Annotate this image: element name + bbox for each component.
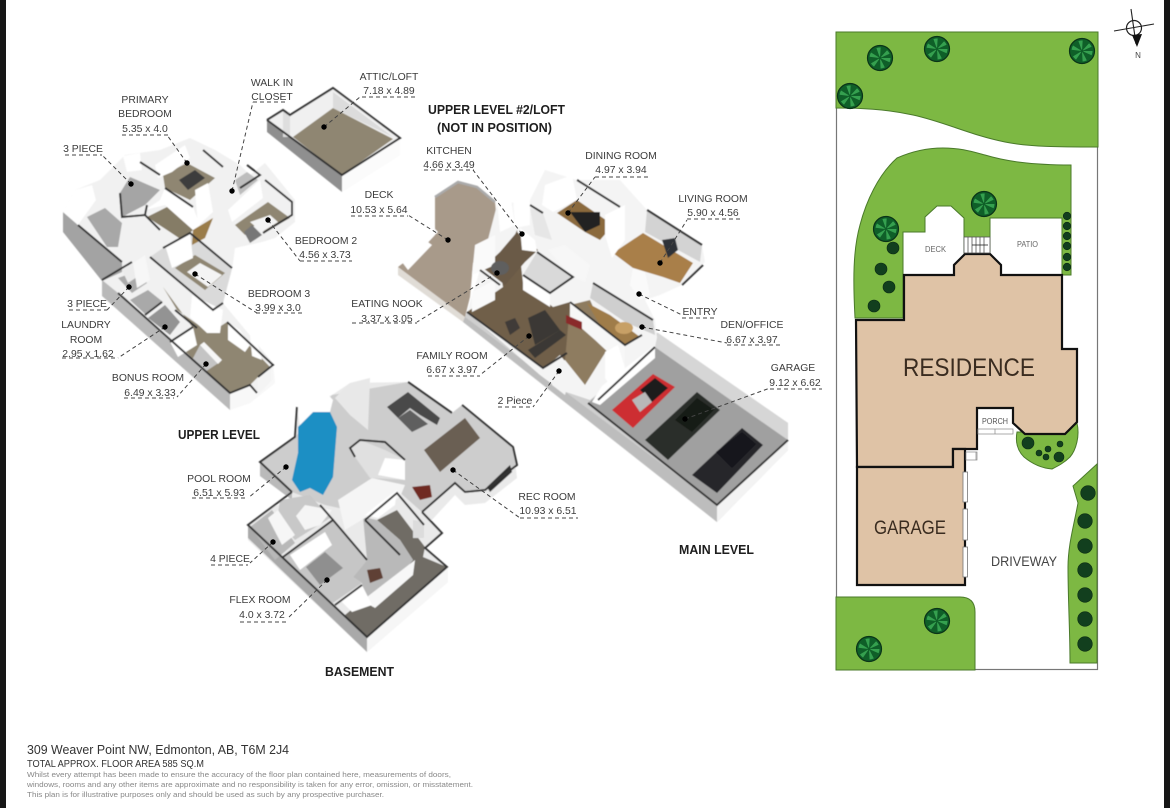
site labels: RESIDENCE	[903, 354, 1035, 382]
room labels: FLEX ROOM	[229, 595, 291, 606]
floor plan: main level	[398, 170, 788, 522]
room labels: EATING NOOK	[351, 299, 423, 310]
room labels: 3.99 x 3.0	[255, 303, 301, 314]
room labels: KITCHEN	[426, 146, 472, 157]
site plan	[836, 32, 1098, 670]
icon: north compass	[1114, 9, 1154, 60]
icon: north compass: N	[1135, 51, 1141, 60]
right strip lawn	[1068, 464, 1097, 663]
leader lines	[62, 97, 822, 622]
footer address and disclaimer: TOTAL APPROX. FLOOR AREA 585 SQ.M	[27, 759, 204, 770]
floor plan: attic loft	[267, 88, 400, 192]
site labels: PORCH	[982, 417, 1008, 426]
site labels	[874, 240, 1057, 569]
deck stairs	[964, 237, 990, 253]
room labels: POOL ROOM	[187, 474, 251, 485]
level headings: MAIN LEVEL	[679, 542, 754, 557]
room labels: ATTIC/LOFT	[360, 72, 419, 83]
level headings: BASEMENT	[325, 664, 394, 679]
floor plan: basement	[248, 378, 517, 652]
room labels: 4.66 x 3.49	[423, 160, 475, 171]
site labels: GARAGE	[874, 518, 946, 539]
room labels: 4.97 x 3.94	[595, 165, 647, 176]
level headings: UPPER LEVEL	[178, 427, 260, 442]
room labels: ENTRY	[682, 307, 718, 318]
room labels: 5.90 x 4.56	[687, 208, 739, 219]
room labels: WALK IN	[251, 78, 293, 89]
room markers	[126, 124, 688, 583]
footer address and disclaimer: This plan is for illustrative purposes only and should be used as such by any prospective purchaser.	[27, 790, 384, 799]
room labels: 4.0 x 3.72	[239, 610, 285, 621]
room labels	[61, 72, 821, 621]
residence building	[856, 254, 1077, 467]
room labels: GARAGE	[771, 363, 815, 374]
room labels: DEN/OFFICE	[721, 320, 784, 331]
room labels: 3 PIECE	[67, 299, 107, 310]
site labels: DRIVEWAY	[991, 554, 1057, 569]
room labels: LIVING ROOM	[678, 194, 748, 205]
room labels: 2.95 x 1.62	[62, 349, 114, 360]
level headings	[178, 102, 754, 679]
site labels: PATIO	[1017, 240, 1038, 249]
room labels: 4 PIECE	[210, 554, 250, 565]
porch garden	[1016, 423, 1078, 469]
room labels: 6.67 x 3.97	[426, 365, 478, 376]
footer address and disclaimer: Whilst every attempt has been made to ensure the accuracy of the floor plan contained here, measurements of doors,	[27, 770, 451, 779]
bottom left lawn	[836, 597, 975, 670]
footer address and disclaimer: windows, rooms and any other items are approximate and no responsibility is taken for any error, omission, or misstatement.	[26, 780, 473, 789]
garage building	[857, 449, 965, 585]
site labels: DECK	[925, 245, 947, 254]
room labels: 7.18 x 4.89	[363, 86, 415, 97]
room labels: REC ROOM	[518, 492, 576, 503]
room labels: 6.49 x 3.33	[124, 388, 176, 399]
room labels: 10.53 x 5.64	[350, 205, 408, 216]
level headings: (NOT IN POSITION)	[437, 120, 552, 135]
room labels: BONUS ROOM	[112, 373, 184, 384]
room labels: BEDROOM	[118, 109, 172, 120]
room labels: DINING ROOM	[585, 151, 657, 162]
room labels: DECK	[365, 190, 394, 201]
room labels: 4.56 x 3.73	[299, 250, 351, 261]
footer address and disclaimer: 309 Weaver Point NW, Edmonton, AB, T6M 2J4	[27, 743, 289, 757]
room labels: 9.12 x 6.62	[769, 378, 821, 389]
room labels: BEDROOM 3	[248, 289, 310, 300]
porch	[966, 429, 1013, 460]
room labels: 5.35 x 4.0	[122, 124, 168, 135]
room labels: 6.51 x 5.93	[193, 488, 245, 499]
room labels: 10.93 x 6.51	[519, 506, 577, 517]
room labels: ROOM	[70, 335, 102, 346]
trees	[838, 36, 1094, 662]
level headings: UPPER LEVEL #2/LOFT	[428, 102, 565, 117]
shrubs	[868, 212, 1095, 651]
side lawn	[854, 148, 1071, 318]
room labels: 6.67 x 3.97	[726, 335, 778, 346]
footer address and disclaimer	[26, 743, 473, 799]
garage doors	[963, 472, 968, 577]
room labels: BEDROOM 2	[295, 236, 357, 247]
room labels: 3.37 x 3.05	[361, 314, 413, 325]
room labels: 3 PIECE	[63, 144, 103, 155]
room labels: LAUNDRY	[61, 320, 111, 331]
room labels: CLOSET	[251, 92, 293, 103]
room labels: PRIMARY	[121, 95, 169, 106]
room labels: FAMILY ROOM	[416, 351, 488, 362]
back yard lawn	[836, 32, 1098, 147]
room labels: 2 Piece	[498, 396, 533, 407]
floor plan: upper level	[63, 138, 295, 410]
